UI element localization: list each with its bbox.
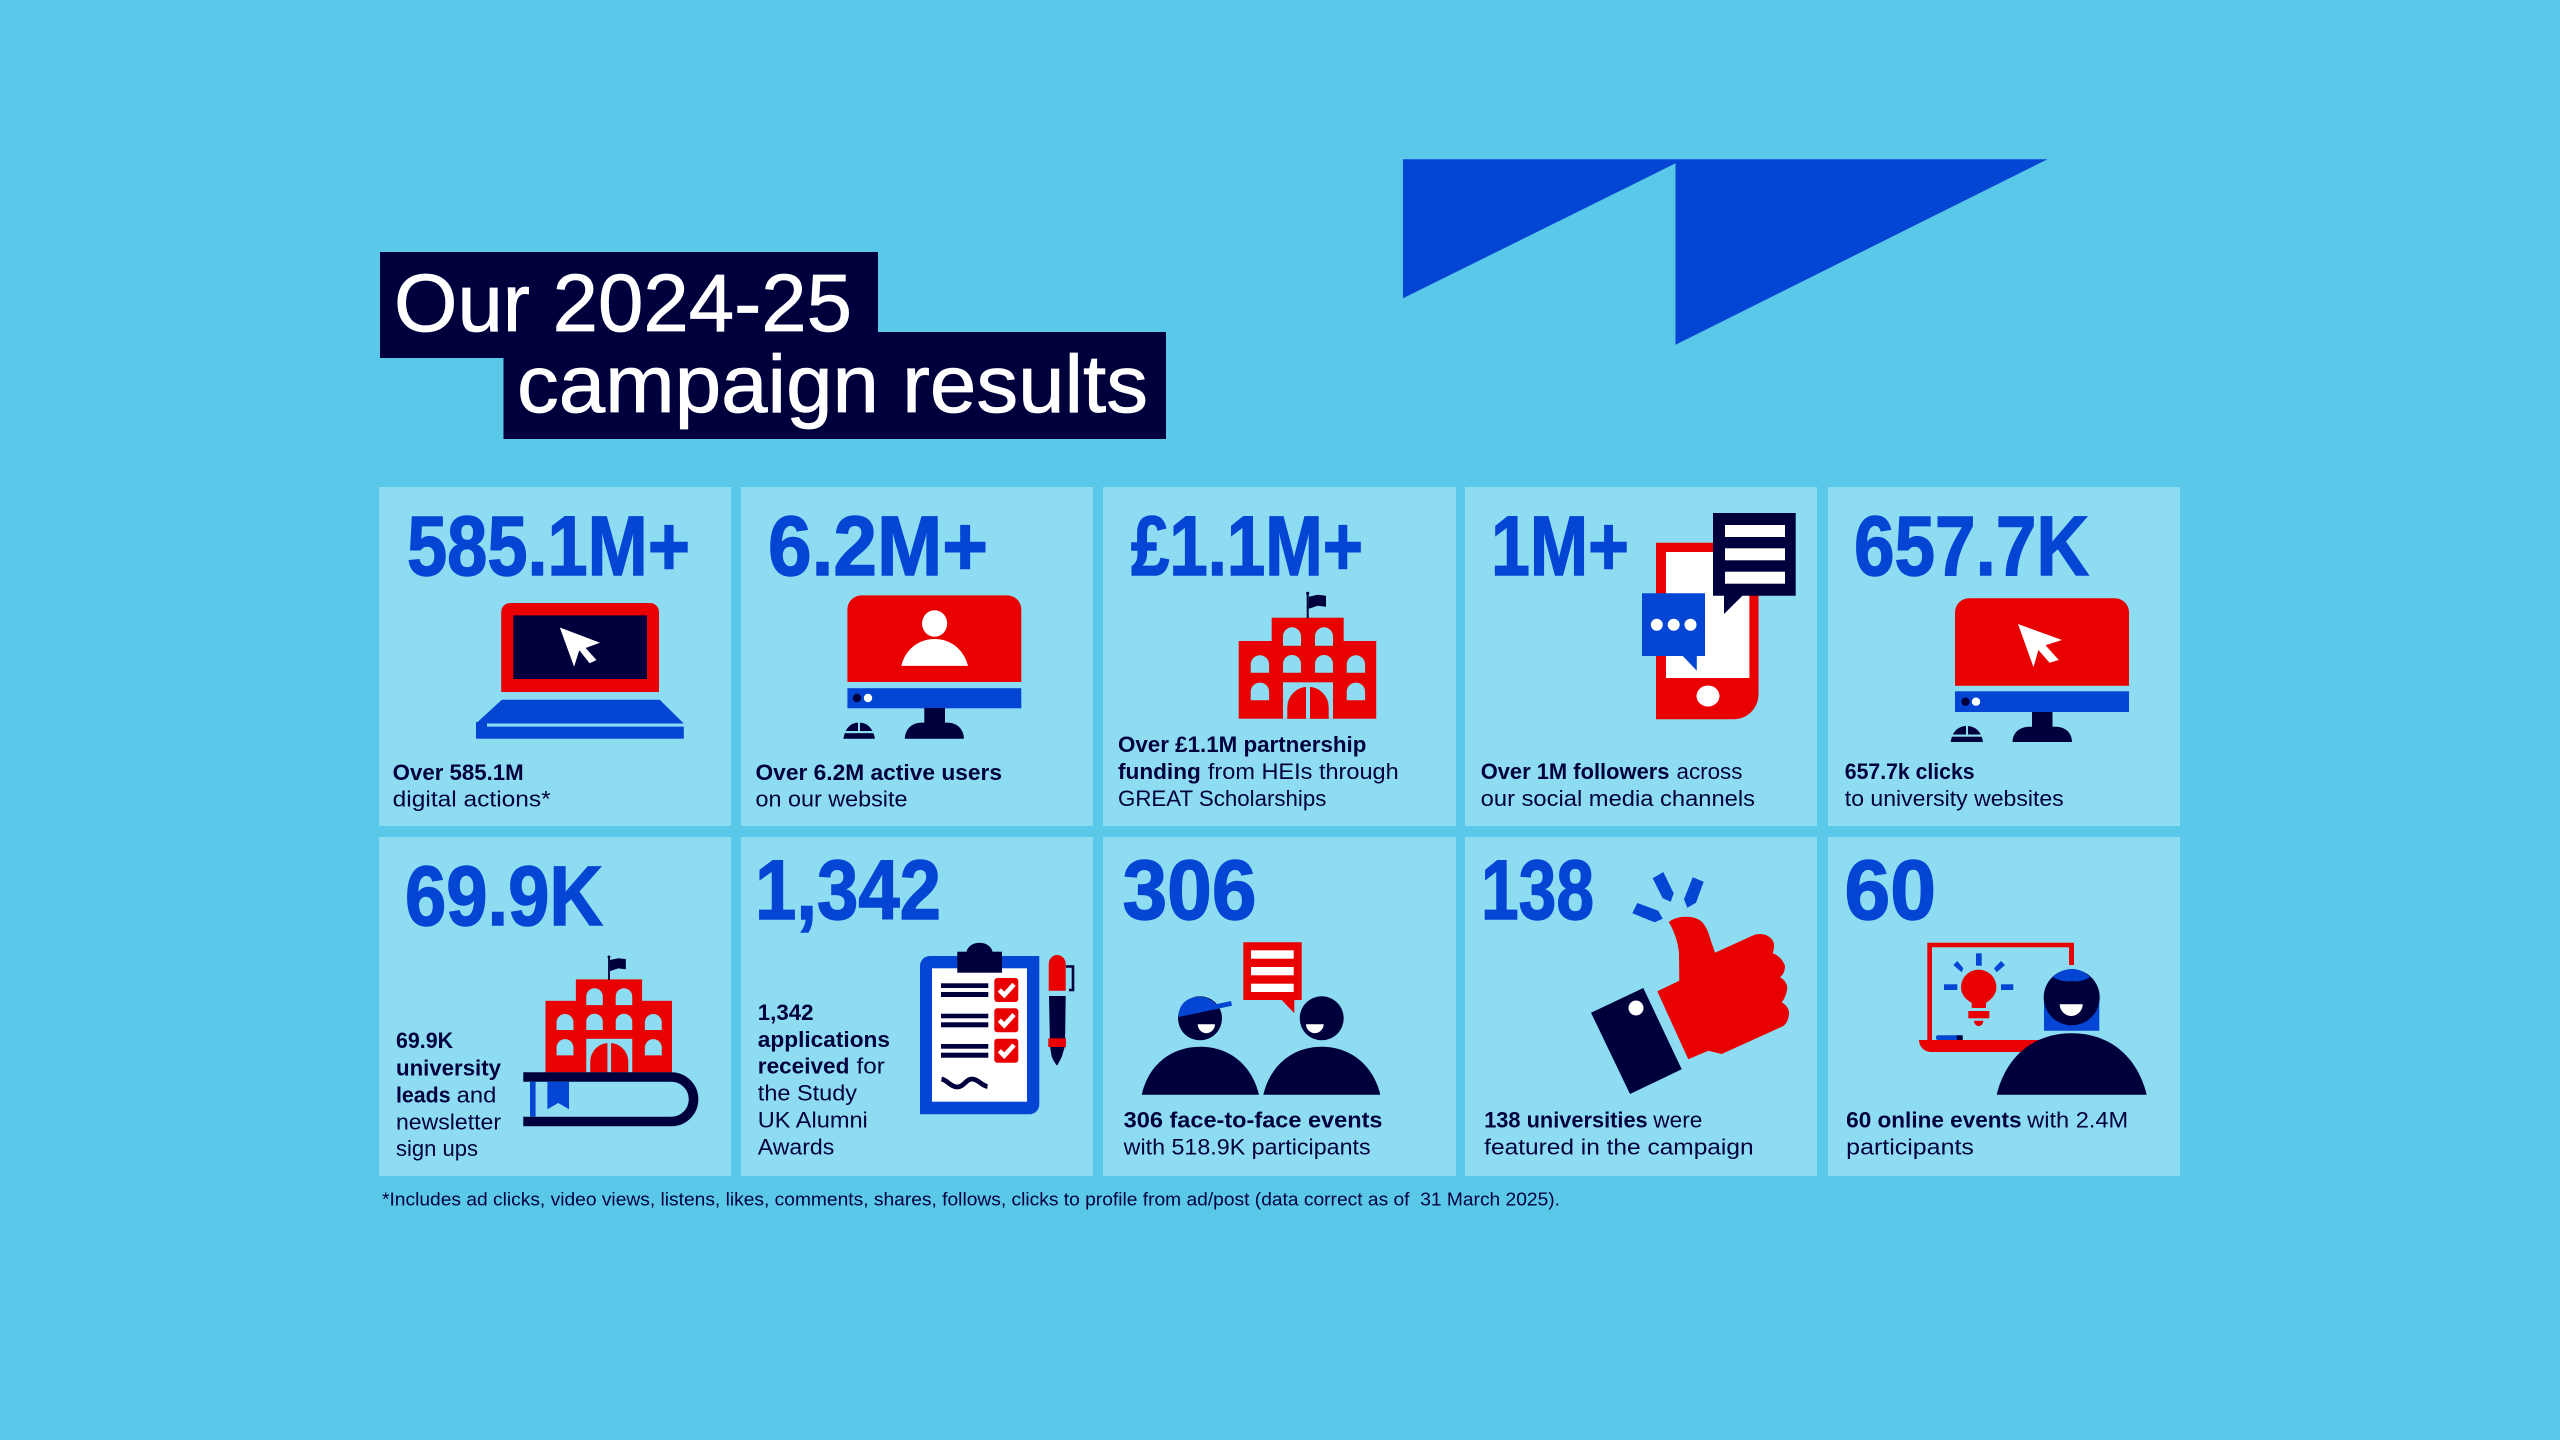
caption: were (1652, 1107, 1702, 1132)
caption: and (457, 1083, 496, 1108)
panel: university leads (379, 837, 731, 1176)
caption: 69.9K (396, 1028, 453, 1053)
caption: to university websites (1845, 786, 2064, 811)
caption: Over 6.2M active users (756, 760, 1002, 785)
caption: with 2.4M (2026, 1107, 2128, 1132)
caption: Over 585.1M (393, 760, 524, 785)
icon: monitor with cursor (1951, 598, 2129, 742)
footnote: *Includes ad clicks, video views, listens, likes, comments, shares, follows, clicks to profile from ad/post (data correct as of 31 March 2025). (382, 1190, 1560, 1210)
icon: university building (1239, 592, 1376, 719)
caption (1118, 732, 1399, 811)
caption: newsletter (396, 1110, 501, 1135)
caption (393, 760, 551, 812)
title (380, 252, 1166, 439)
caption: funding (1118, 759, 1201, 784)
figure: 69.9K: 69.9K (405, 849, 603, 943)
caption: 306 face-to-face events (1124, 1107, 1382, 1132)
caption: Over £1.1M partnership (1118, 732, 1366, 757)
panel: face-to-face events (1103, 837, 1456, 1176)
caption: from HEIs through (1208, 759, 1399, 784)
icon: two people talking (1142, 942, 1380, 1095)
caption: 138 universities (1484, 1107, 1648, 1132)
caption: our social media channels (1481, 786, 1755, 811)
caption: across (1676, 759, 1742, 784)
caption: sign ups (396, 1136, 478, 1161)
figure: 6.2M+: 6.2M+ (768, 499, 988, 593)
caption: on our website (756, 786, 908, 812)
panel: social followers (1465, 487, 1817, 826)
caption: UK Alumni (758, 1108, 868, 1133)
caption: university (396, 1056, 502, 1081)
caption: for (856, 1054, 885, 1079)
icon: presenter with whiteboard (1919, 943, 2147, 1095)
figure: 138: 138 (1481, 843, 1594, 937)
caption: 657.7k clicks (1845, 759, 1975, 784)
caption: digital actions* (393, 786, 551, 812)
panel: partnership funding (1103, 487, 1456, 826)
figure: 1,342: 1,342 (755, 843, 941, 937)
title: Our 2024-25 (394, 258, 852, 349)
figure: 60: 60 (1844, 843, 1936, 937)
caption: Awards (758, 1135, 834, 1160)
panel: active users (741, 487, 1093, 826)
caption: received (758, 1054, 849, 1079)
caption: GREAT Scholarships (1118, 786, 1326, 811)
panel: digital actions (379, 487, 731, 826)
caption: Over 1M followers (1481, 759, 1670, 784)
decorative blue triangles (1403, 159, 2047, 345)
icon: phone with chat bubbles (1642, 513, 1796, 719)
figure: 657.7K: 657.7K (1854, 499, 2089, 593)
icon: clipboard and pen (920, 943, 1073, 1114)
caption: 60 online events (1846, 1107, 2022, 1132)
figure: 306: 306 (1122, 843, 1256, 937)
panel: alumni award applications (741, 837, 1093, 1176)
caption: applications (758, 1027, 890, 1052)
caption: featured in the campaign (1484, 1134, 1754, 1159)
icon: laptop with cursor (476, 603, 684, 739)
figure: 585.1M+: 585.1M+ (407, 499, 690, 593)
caption (1123, 1107, 1382, 1159)
caption: the Study (758, 1081, 857, 1106)
caption (396, 1028, 502, 1161)
caption: 1,342 (758, 1000, 814, 1025)
caption (1845, 759, 2064, 811)
icon: building on book (523, 955, 694, 1122)
icon: thumbs up (1591, 872, 1789, 1094)
title: campaign results (517, 339, 1148, 430)
caption (758, 1000, 890, 1160)
caption (756, 760, 1002, 812)
icon: monitor with user (843, 595, 1021, 739)
caption (1484, 1107, 1754, 1159)
figure: £1.1M+: £1.1M+ (1131, 499, 1363, 593)
figure: 1M+: 1M+ (1491, 499, 1629, 593)
caption: with 518.9K participants (1123, 1134, 1371, 1159)
panel: online events (1828, 837, 2180, 1176)
caption (1846, 1107, 2128, 1159)
caption (1481, 759, 1755, 811)
panel: universities featured (1465, 837, 1817, 1176)
panel: university clicks (1828, 487, 2180, 826)
caption: participants (1846, 1134, 1974, 1159)
caption: leads (396, 1083, 451, 1108)
